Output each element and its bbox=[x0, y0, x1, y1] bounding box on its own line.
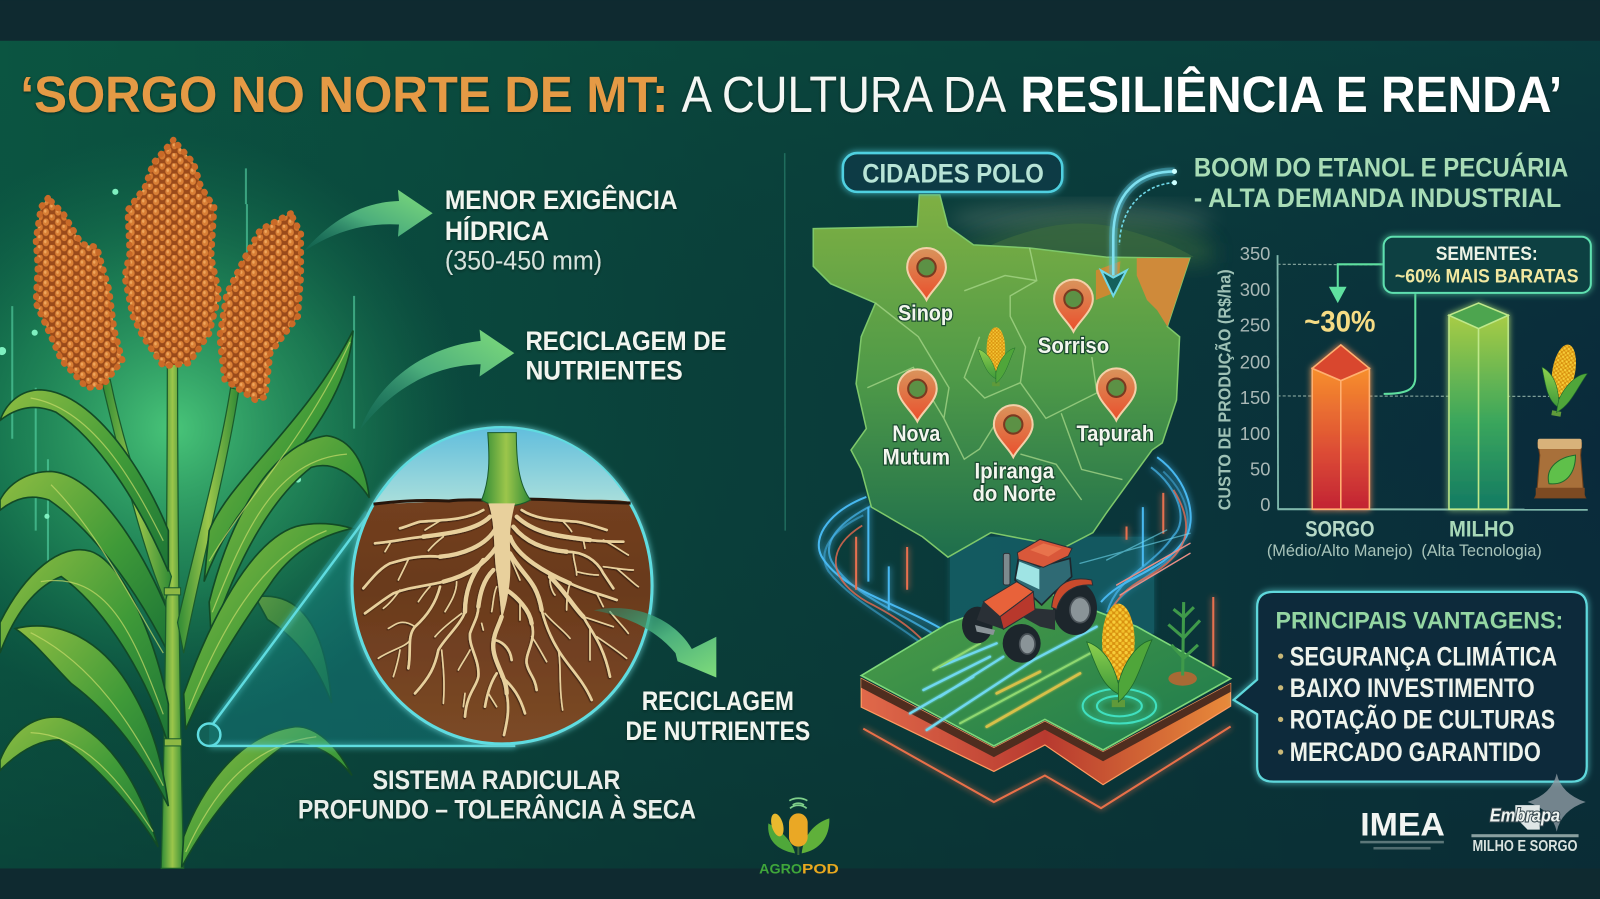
logo: imea: IMEA bbox=[1360, 806, 1445, 843]
text: boom do etanol bbox=[1194, 153, 1568, 213]
list bbox=[1278, 641, 1557, 767]
callout: sementes bbox=[1384, 237, 1591, 293]
field platform bbox=[861, 530, 1231, 808]
leaf: lowest right bbox=[182, 727, 352, 867]
y axis ticks: 200 bbox=[1240, 351, 1270, 372]
text: menor exigência hídrica: HÍDRICA bbox=[445, 216, 549, 246]
leaf: faint drooping bbox=[255, 596, 332, 703]
y axis ticks bbox=[1240, 243, 1270, 515]
leaf: middle left bbox=[0, 550, 168, 745]
young plant bbox=[1168, 602, 1200, 686]
category labels: (Alta Tecnologia) bbox=[1421, 542, 1542, 560]
right peduncle bbox=[178, 388, 239, 653]
city labels: Nova bbox=[892, 421, 941, 446]
y axis ticks: 100 bbox=[1240, 423, 1270, 444]
tractor bbox=[962, 539, 1097, 663]
watermark star bbox=[1528, 773, 1586, 832]
logo: embrapa: Embrapa bbox=[1490, 804, 1560, 825]
title: A CULTURA DA bbox=[682, 66, 1006, 123]
stem in soil bbox=[482, 433, 531, 506]
pin: Sorriso bbox=[1054, 280, 1093, 332]
chassis bbox=[1003, 608, 1055, 630]
icon: corn on map bbox=[978, 327, 1015, 386]
text: reciclagem de nutrientes top: RECICLAGEM DE bbox=[526, 326, 727, 356]
corn on field bbox=[1087, 604, 1152, 707]
map: Mato Grosso bbox=[813, 195, 1190, 557]
leaf: second left bbox=[0, 471, 168, 653]
arrow: demand into map bbox=[1101, 169, 1177, 296]
y axis ticks: 250 bbox=[1240, 315, 1270, 336]
text: boom do etanol: BOOM DO ETANOL E PECUÁRIA bbox=[1194, 153, 1568, 183]
glow ring bbox=[1083, 689, 1156, 723]
text: menor exigência hídrica: (350-450 mm) bbox=[445, 245, 602, 275]
badge: cidades polo: CIDADES POLO bbox=[862, 159, 1044, 189]
logo: embrapa bbox=[1471, 804, 1579, 855]
logo: embrapa: MILHO E SORGO bbox=[1472, 838, 1578, 855]
left peduncle bbox=[102, 380, 171, 602]
text: sistema radicular: SISTEMA RADICULAR bbox=[372, 765, 620, 795]
category labels: MILHO bbox=[1449, 517, 1514, 542]
panicle: center bbox=[124, 140, 219, 366]
leaf: right lower bbox=[184, 524, 352, 730]
callout: sementes: SEMENTES: bbox=[1436, 243, 1538, 265]
bar: milho bbox=[1449, 303, 1508, 509]
rear wheel bbox=[1053, 582, 1097, 635]
front wheel near bbox=[1003, 624, 1041, 663]
cab bbox=[1015, 558, 1072, 605]
leaf: upper right bbox=[204, 331, 353, 582]
city labels: Tapurah bbox=[1077, 421, 1154, 446]
city labels bbox=[883, 300, 1154, 506]
title bbox=[20, 65, 1562, 123]
roof bbox=[1017, 539, 1072, 567]
text: reciclagem de nutrientes bottom bbox=[626, 686, 810, 746]
bar chart: production cost bbox=[1215, 237, 1592, 560]
field surface bbox=[861, 590, 1231, 750]
leaf: middle right bbox=[209, 436, 369, 638]
logo: agropod: AGRO bbox=[759, 861, 802, 877]
y axis ticks: 300 bbox=[1240, 279, 1270, 300]
y axis title: CUSTO DE PRODUÇÃO (R$/ha) bbox=[1215, 269, 1235, 510]
panicle: right bbox=[219, 213, 301, 400]
main stem bbox=[161, 347, 184, 868]
leaf: lower left bbox=[15, 626, 168, 806]
tech swirl lines bbox=[819, 457, 1213, 666]
value label: ~30% bbox=[1304, 306, 1376, 339]
arrow: nutrient recycling top bbox=[360, 330, 514, 430]
roots bbox=[363, 503, 638, 735]
hood bbox=[983, 582, 1033, 617]
leaf: upper left bbox=[0, 390, 168, 571]
pin: Nova Mutum bbox=[898, 369, 937, 421]
y axis ticks: 350 bbox=[1240, 243, 1270, 264]
text: sistema radicular: PROFUNDO – TOLERÂNCIA À SECA bbox=[298, 794, 696, 824]
category labels: SORGO bbox=[1305, 517, 1374, 542]
arrow: nutrient recycling bottom bbox=[594, 608, 716, 678]
callout: sementes: ~60% MAIS BARATAS bbox=[1395, 266, 1579, 288]
map: orange region bbox=[1137, 258, 1190, 327]
pin: Tapurah bbox=[1097, 368, 1136, 420]
text: reciclagem de nutrientes top: NUTRIENTES bbox=[526, 356, 683, 386]
title: RESILIÊNCIA E RENDA’ bbox=[1020, 65, 1562, 123]
field light streaks bbox=[910, 530, 1190, 730]
bar: sorgo bbox=[1312, 345, 1369, 509]
leaf: lowest left bbox=[0, 717, 158, 847]
y axis ticks: 0 bbox=[1260, 494, 1270, 515]
title: ‘SORGO NO NORTE DE MT: bbox=[20, 66, 668, 123]
text: reciclagem de nutrientes top bbox=[526, 326, 727, 386]
sky and soil circle bbox=[352, 428, 652, 744]
fender bbox=[1052, 579, 1093, 609]
logo: agropod bbox=[759, 798, 839, 877]
panel: principais vantagens bbox=[1234, 592, 1587, 782]
sorghum plant bbox=[0, 140, 369, 868]
heading: PRINCIPAIS VANTAGENS: bbox=[1276, 608, 1563, 635]
connector bbox=[1331, 264, 1415, 394]
list: BAIXO INVESTIMENTO bbox=[1290, 673, 1535, 703]
magnifier: root system bbox=[198, 428, 652, 746]
lens cone bbox=[198, 510, 515, 746]
pin: Sinop bbox=[907, 248, 946, 300]
logo: agropod: POD bbox=[802, 861, 839, 877]
icon: corn bbox=[1534, 341, 1592, 420]
text: reciclagem de nutrientes bottom: DE NUTRIENTES bbox=[626, 716, 810, 746]
front wheel far bbox=[962, 607, 993, 643]
landscape behind map bbox=[949, 205, 1214, 263]
text: sistema radicular bbox=[298, 765, 696, 824]
y axis ticks: 150 bbox=[1240, 387, 1270, 408]
text: menor exigência hídrica: MENOR EXIGÊNCIA bbox=[445, 185, 678, 215]
text: reciclagem de nutrientes bottom: RECICLAGEM bbox=[642, 686, 794, 716]
panicle: left bbox=[36, 198, 122, 388]
city labels: do Norte bbox=[972, 481, 1056, 506]
tech glow panel bbox=[950, 537, 1154, 634]
city labels: Ipiranga bbox=[974, 459, 1055, 484]
text: menor exigência hídrica bbox=[445, 185, 678, 275]
city labels: Sorriso bbox=[1038, 333, 1109, 358]
city labels: Sinop bbox=[898, 300, 953, 325]
arrow: water requirement bbox=[303, 190, 433, 252]
icon: seed bag bbox=[1535, 439, 1586, 498]
category labels bbox=[1267, 517, 1542, 560]
category labels: (Médio/Alto Manejo) bbox=[1267, 542, 1413, 560]
pin: Ipiranga do Norte bbox=[994, 405, 1033, 457]
list: MERCADO GARANTIDO bbox=[1290, 737, 1541, 767]
text: boom do etanol: - ALTA DEMANDA INDUSTRIAL bbox=[1194, 183, 1561, 213]
city labels: Mutum bbox=[883, 444, 950, 469]
y axis ticks: 50 bbox=[1250, 459, 1270, 480]
